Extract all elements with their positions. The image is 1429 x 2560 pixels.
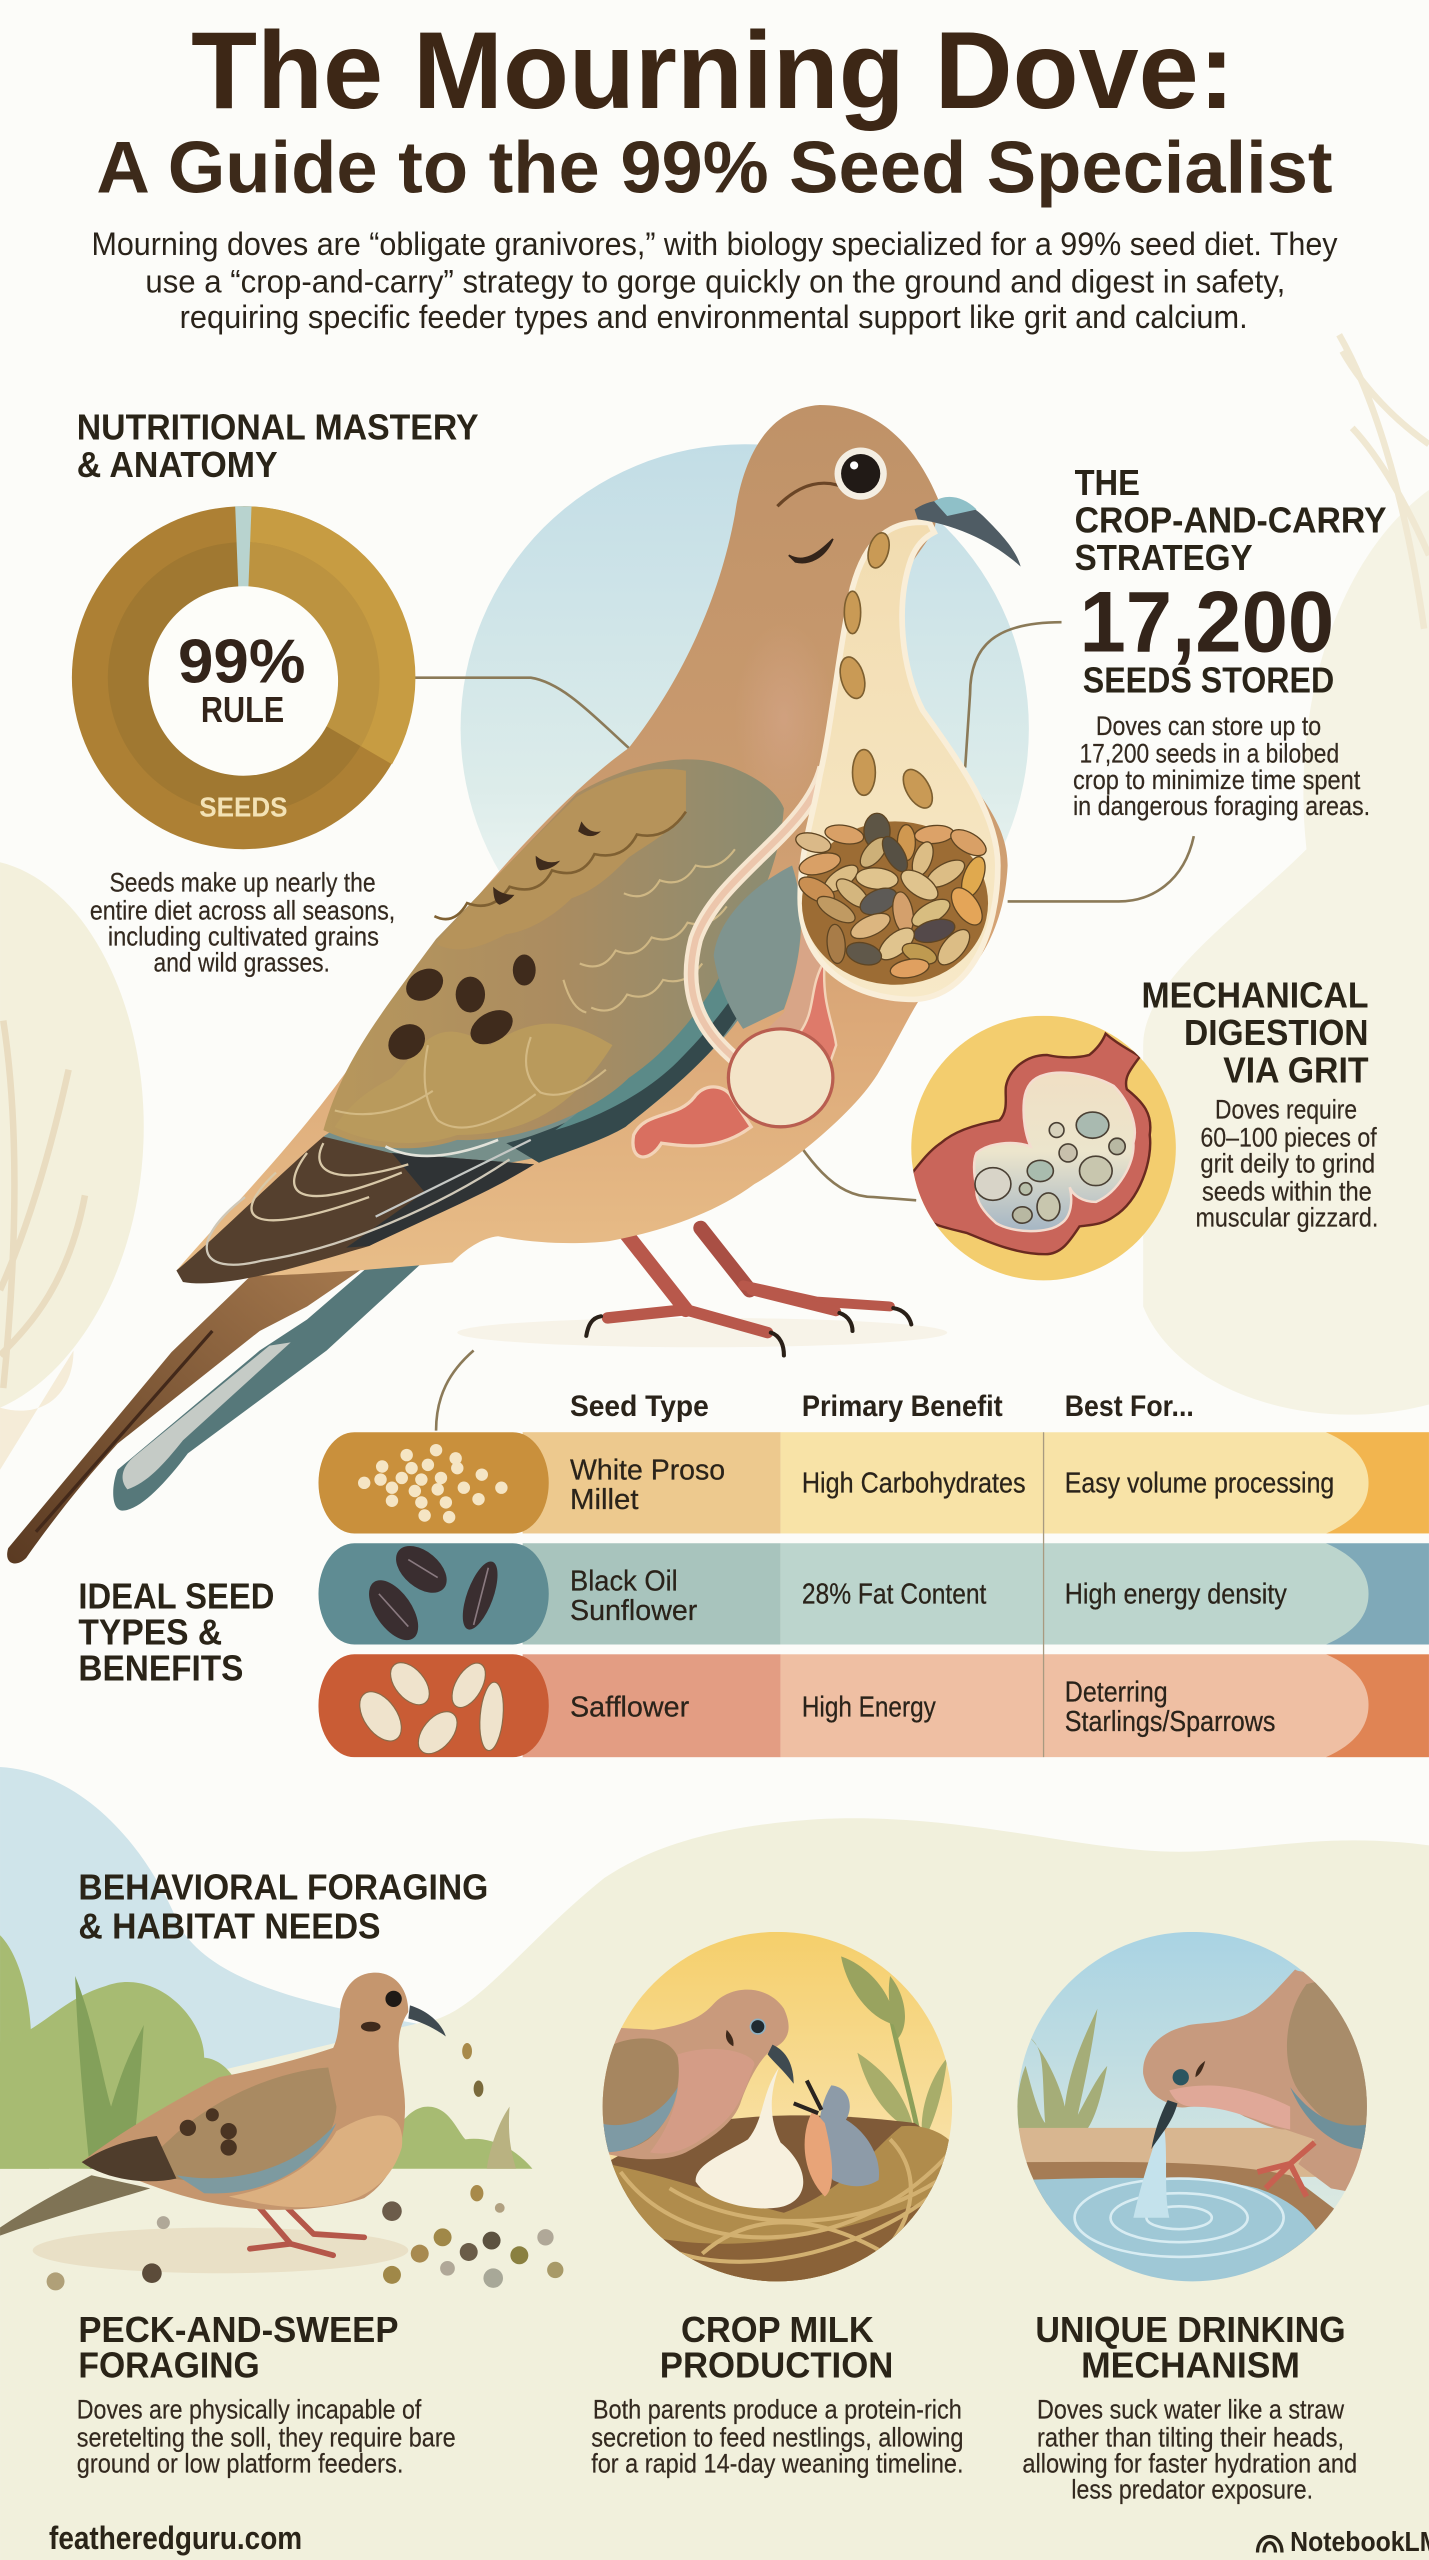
wing feather scallops	[434, 812, 686, 919]
caption: drinking: Doves suck water like a straw	[1037, 2395, 1345, 2425]
caption: drinking: rather than tilting their heads,	[1037, 2422, 1344, 2452]
heading: IDEAL SEED	[78, 1576, 274, 1617]
lower loop	[691, 768, 825, 1061]
ground shadow	[457, 1318, 947, 1347]
nestling	[794, 2081, 879, 2196]
water stream	[1134, 2130, 1170, 2218]
panel: nutritional mastery	[72, 406, 479, 978]
panel: crop-and-carry	[1073, 462, 1387, 821]
row: white proso millet: Easy volume processing	[1065, 1468, 1334, 1500]
intro text: use a “crop-and-carry” strategy to gorge quickly on the ground and digest in safety,	[145, 262, 1285, 299]
table header: Seed Type	[570, 1390, 709, 1423]
row: black oil sunflower: Sunflower	[570, 1595, 698, 1627]
parent dove	[599, 1990, 789, 2159]
intro text: requiring specific feeder types and environmental support like grit and calcium.	[180, 298, 1248, 335]
donut chart: SEEDS	[199, 792, 287, 823]
parent breast	[650, 2049, 755, 2153]
wing dark primaries	[176, 1137, 534, 1283]
heading: BEHAVIORAL FORAGING	[78, 1866, 488, 1907]
wing light scallops	[335, 849, 735, 1128]
caption: crop milk: CROP MILK	[681, 2309, 874, 2350]
description: 17,200 seeds in a bilobed	[1079, 739, 1339, 769]
heading: STRATEGY	[1075, 537, 1253, 578]
dove face marks	[777, 483, 849, 563]
caption: crop milk: Both parents produce a protein-rich	[593, 2395, 962, 2425]
row: safflower: High Energy	[802, 1691, 936, 1723]
description: and wild grasses.	[154, 948, 330, 978]
connector lines	[415, 622, 1194, 1431]
description: including cultivated grains	[108, 922, 379, 952]
heading: THE	[1075, 462, 1140, 503]
wing grey-blue feathers	[323, 906, 787, 1163]
dove eye	[835, 447, 887, 500]
gizzard	[728, 1029, 833, 1127]
small dove legs	[250, 2205, 364, 2255]
footer: source: featheredguru.com	[49, 2519, 302, 2556]
description: Seeds make up nearly the	[109, 868, 376, 898]
nest scene	[596, 1932, 964, 2286]
icon: safflower seeds	[351, 1655, 506, 1761]
heading	[78, 1576, 274, 1688]
small dove primaries	[82, 2136, 176, 2181]
dove tail	[7, 1257, 428, 1563]
big number: 17,200	[1079, 575, 1334, 671]
dove eye and beak	[1151, 2061, 1205, 2149]
description	[1195, 1095, 1378, 1232]
heading: NUTRITIONAL MASTERY	[77, 406, 479, 447]
heading: DIGESTION	[1184, 1012, 1369, 1053]
blue sky circle behind dove	[461, 444, 1029, 1013]
small dove tail	[0, 2175, 150, 2236]
small dove spots	[180, 2108, 237, 2156]
row: white proso millet: High Carbohydrates	[802, 1468, 1026, 1500]
heading: & ANATOMY	[77, 444, 278, 485]
row: black oil sunflower: Black Oil	[570, 1566, 678, 1598]
row: safflower: Deterring	[1065, 1677, 1168, 1709]
row: white proso millet	[318, 1432, 1429, 1533]
reeds	[841, 1956, 947, 2143]
dove legs and feet	[586, 1228, 911, 1355]
ledge	[1016, 2128, 1369, 2177]
description	[1073, 711, 1370, 821]
heading	[78, 1866, 488, 1946]
caption: peck and sweep: seretelting the soll, they require bare	[77, 2422, 456, 2452]
small dove grey feathers	[176, 2123, 336, 2193]
nest back	[604, 2115, 964, 2286]
tract side teardrop	[714, 866, 801, 1029]
heading: TYPES &	[78, 1612, 222, 1653]
title	[96, 10, 1333, 209]
pool	[1034, 2178, 1316, 2282]
caption: drinking	[1022, 2309, 1357, 2505]
panel: mechanical digestion	[908, 975, 1378, 1284]
drinking scene	[1016, 1932, 1375, 2286]
esophagus seeds	[836, 530, 938, 813]
row: black oil sunflower	[318, 1537, 1429, 1649]
description: crop to minimize time spent	[1073, 765, 1361, 795]
row: white proso millet: White Proso	[570, 1455, 725, 1487]
description: 60–100 pieces of	[1200, 1122, 1377, 1152]
scattered seeds	[47, 2043, 563, 2290]
description	[90, 868, 395, 978]
heading: & HABITAT NEEDS	[78, 1905, 381, 1946]
dove foot	[1257, 2143, 1315, 2196]
title: The Mourning Dove:	[191, 10, 1235, 132]
dove throat pink	[1169, 2085, 1290, 2130]
table header: Best For...	[1065, 1390, 1194, 1423]
ripples	[1075, 2179, 1284, 2257]
dove beak	[915, 497, 1021, 567]
row: safflower: Starlings/Sparrows	[1065, 1706, 1275, 1738]
caption: drinking: MECHANISM	[1081, 2345, 1300, 2386]
small dove body	[82, 1973, 408, 2210]
heading	[1075, 462, 1387, 578]
intro text	[91, 225, 1338, 335]
panel: behavioral foraging	[0, 1866, 1375, 2505]
small dove belly	[229, 2115, 402, 2207]
wing golden feather patch	[436, 769, 686, 949]
description: Doves require	[1215, 1095, 1357, 1125]
caption: drinking: allowing for faster hydration and	[1022, 2448, 1357, 2478]
caption: peck and sweep	[77, 2309, 456, 2478]
bushes	[0, 1935, 532, 2169]
crop milk	[696, 2067, 803, 2208]
wing coverts	[323, 759, 784, 1148]
feather under strip	[385, 1140, 498, 1156]
description: entire diet across all seasons,	[90, 895, 395, 925]
parent wing	[599, 2038, 679, 2151]
caption: crop milk: secretion to feed nestlings, allowing	[591, 2422, 964, 2452]
heading: MECHANICAL	[1142, 975, 1369, 1016]
caption: drinking: less predator exposure.	[1071, 2475, 1313, 2505]
icon: sunflower seeds	[359, 1537, 505, 1649]
caption: crop milk	[591, 2309, 964, 2478]
caption: crop milk: for a rapid 14-day weaning timeline.	[591, 2448, 964, 2478]
donut chart: 99%	[178, 628, 305, 697]
heading: VIA GRIT	[1223, 1050, 1369, 1091]
description: grit deily to grind	[1200, 1149, 1375, 1179]
title: A Guide to the 99% Seed Specialist	[96, 126, 1333, 209]
intro text: Mourning doves are “obligate granivores,” with biology specialized for a 99% seed diet. They	[91, 225, 1338, 262]
drinking dove	[1143, 1960, 1375, 2196]
neck pink shading	[735, 621, 833, 817]
caption: crop milk: PRODUCTION	[660, 2345, 893, 2386]
heading: CROP-AND-CARRY	[1075, 499, 1387, 540]
row: black oil sunflower: High energy density	[1065, 1579, 1288, 1611]
dove body	[176, 405, 1008, 1276]
foraging scene	[0, 1935, 563, 2290]
body pink between tract	[751, 862, 825, 1070]
caption: peck and sweep: FORAGING	[78, 2345, 260, 2386]
gizzard inset	[908, 1016, 1179, 1284]
description: in dangerous foraging areas.	[1073, 791, 1370, 821]
caption: peck and sweep: ground or low platform feeders.	[77, 2448, 403, 2478]
donut chart: RULE	[201, 689, 284, 730]
icon: millet seeds	[358, 1444, 508, 1523]
dove wing	[1287, 1982, 1367, 2138]
wing primary highlights	[207, 1140, 531, 1265]
small dove wing	[153, 2067, 336, 2181]
table header: Primary Benefit	[802, 1390, 1003, 1423]
row: white proso millet: Millet	[570, 1484, 639, 1516]
row: safflower	[318, 1654, 1429, 1761]
intestine	[633, 960, 836, 1157]
grass	[1016, 2009, 1107, 2131]
ground shadow	[33, 2228, 408, 2273]
heading	[77, 406, 479, 485]
description: seeds within the	[1202, 1176, 1372, 1206]
wing spots	[381, 821, 601, 1067]
table header	[570, 1390, 1194, 1423]
main dove illustration	[7, 405, 1021, 1563]
esophagus and crop	[800, 522, 998, 999]
digestive tract	[633, 522, 998, 1157]
caption: drinking: UNIQUE DRINKING	[1035, 2309, 1346, 2350]
row: black oil sunflower: 28% Fat Content	[802, 1579, 986, 1611]
caption: peck and sweep: Doves are physically incapable of	[77, 2395, 422, 2425]
heading: BENEFITS	[78, 1647, 243, 1688]
description: muscular gizzard.	[1195, 1202, 1378, 1232]
nest	[612, 2126, 949, 2282]
heading	[1142, 975, 1369, 1091]
donut chart	[72, 506, 415, 849]
description: Doves can store up to	[1096, 711, 1321, 741]
panel: ideal seed types	[78, 1390, 1429, 1761]
caption: peck and sweep: PECK-AND-SWEEP	[78, 2309, 399, 2350]
small dove eye and beak	[361, 1991, 446, 2036]
row: safflower: Safflower	[570, 1691, 690, 1723]
parent eye and beak	[726, 2019, 794, 2084]
crop seeds mass	[794, 813, 990, 985]
stat label: SEEDS STORED	[1083, 659, 1334, 700]
